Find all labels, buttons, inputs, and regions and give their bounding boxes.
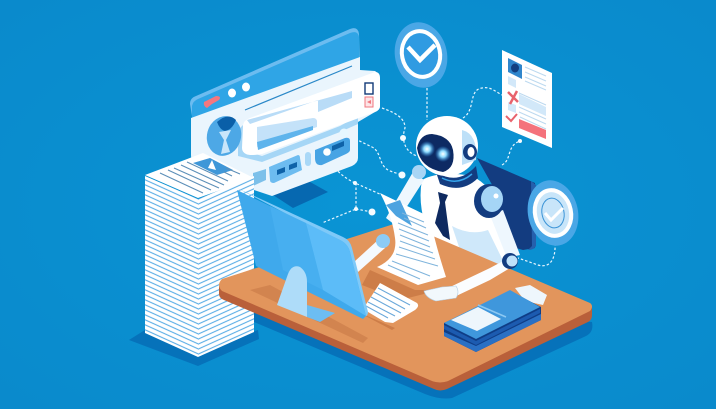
- eraser block: [515, 285, 547, 305]
- checklist red cross: [508, 91, 518, 104]
- chair edge: [528, 181, 536, 250]
- window back panel: [190, 28, 360, 165]
- desk: [219, 222, 592, 390]
- robot torso: [421, 166, 510, 275]
- body shading under card: [238, 116, 358, 162]
- connector dots: [353, 135, 522, 216]
- desk groove: [250, 285, 368, 343]
- checklist photo: [508, 58, 522, 79]
- robot tie: [435, 192, 450, 240]
- side icons: [365, 83, 373, 107]
- check badge right: [522, 176, 584, 250]
- monitor back: [237, 190, 366, 319]
- book label: [451, 307, 501, 331]
- top sheet text lines: [160, 162, 240, 193]
- window body: [191, 57, 380, 196]
- paper stack: [145, 153, 254, 357]
- main card: [242, 72, 380, 155]
- book stack: [444, 285, 547, 352]
- robot visor: [417, 134, 454, 172]
- stack left face: [145, 176, 198, 357]
- header rule: [245, 66, 352, 110]
- checklist red bar: [519, 119, 546, 139]
- checklist boxes: [508, 76, 546, 116]
- robot ear: [462, 130, 477, 165]
- robot head: [416, 116, 478, 176]
- top sheet photo: [193, 158, 233, 175]
- stack right face: [198, 176, 254, 357]
- monitor: [237, 188, 368, 322]
- monitor stand: [277, 266, 307, 317]
- lower book: [444, 314, 541, 352]
- window shadow: [270, 178, 328, 208]
- checklist lines: [519, 67, 546, 129]
- connector lines: [322, 88, 555, 266]
- avatar: [202, 112, 246, 160]
- checklist red check: [506, 114, 517, 121]
- check badge top: [389, 17, 453, 93]
- desk side: [219, 286, 592, 390]
- robot neck collar: [436, 166, 478, 188]
- robot: [354, 116, 520, 301]
- stack top sheet: [145, 153, 254, 198]
- chair: [477, 158, 535, 250]
- toolbar buttons: [253, 138, 350, 186]
- held document: [377, 193, 446, 285]
- robot eyes: [419, 141, 451, 162]
- floating checklist document: [502, 50, 552, 148]
- desk document: [363, 283, 418, 323]
- browser window: [190, 28, 380, 196]
- desk top: [219, 222, 592, 382]
- robot hand: [424, 286, 458, 301]
- desk and stack shadows: [129, 298, 592, 398]
- window controls: [204, 82, 250, 108]
- monitor base: [307, 305, 335, 322]
- paper shadows: [358, 270, 440, 330]
- robot left arm: [354, 165, 426, 272]
- robot right arm: [424, 184, 520, 301]
- glow point: [340, 128, 348, 138]
- monitor edge: [237, 188, 368, 316]
- upper book: [444, 290, 540, 339]
